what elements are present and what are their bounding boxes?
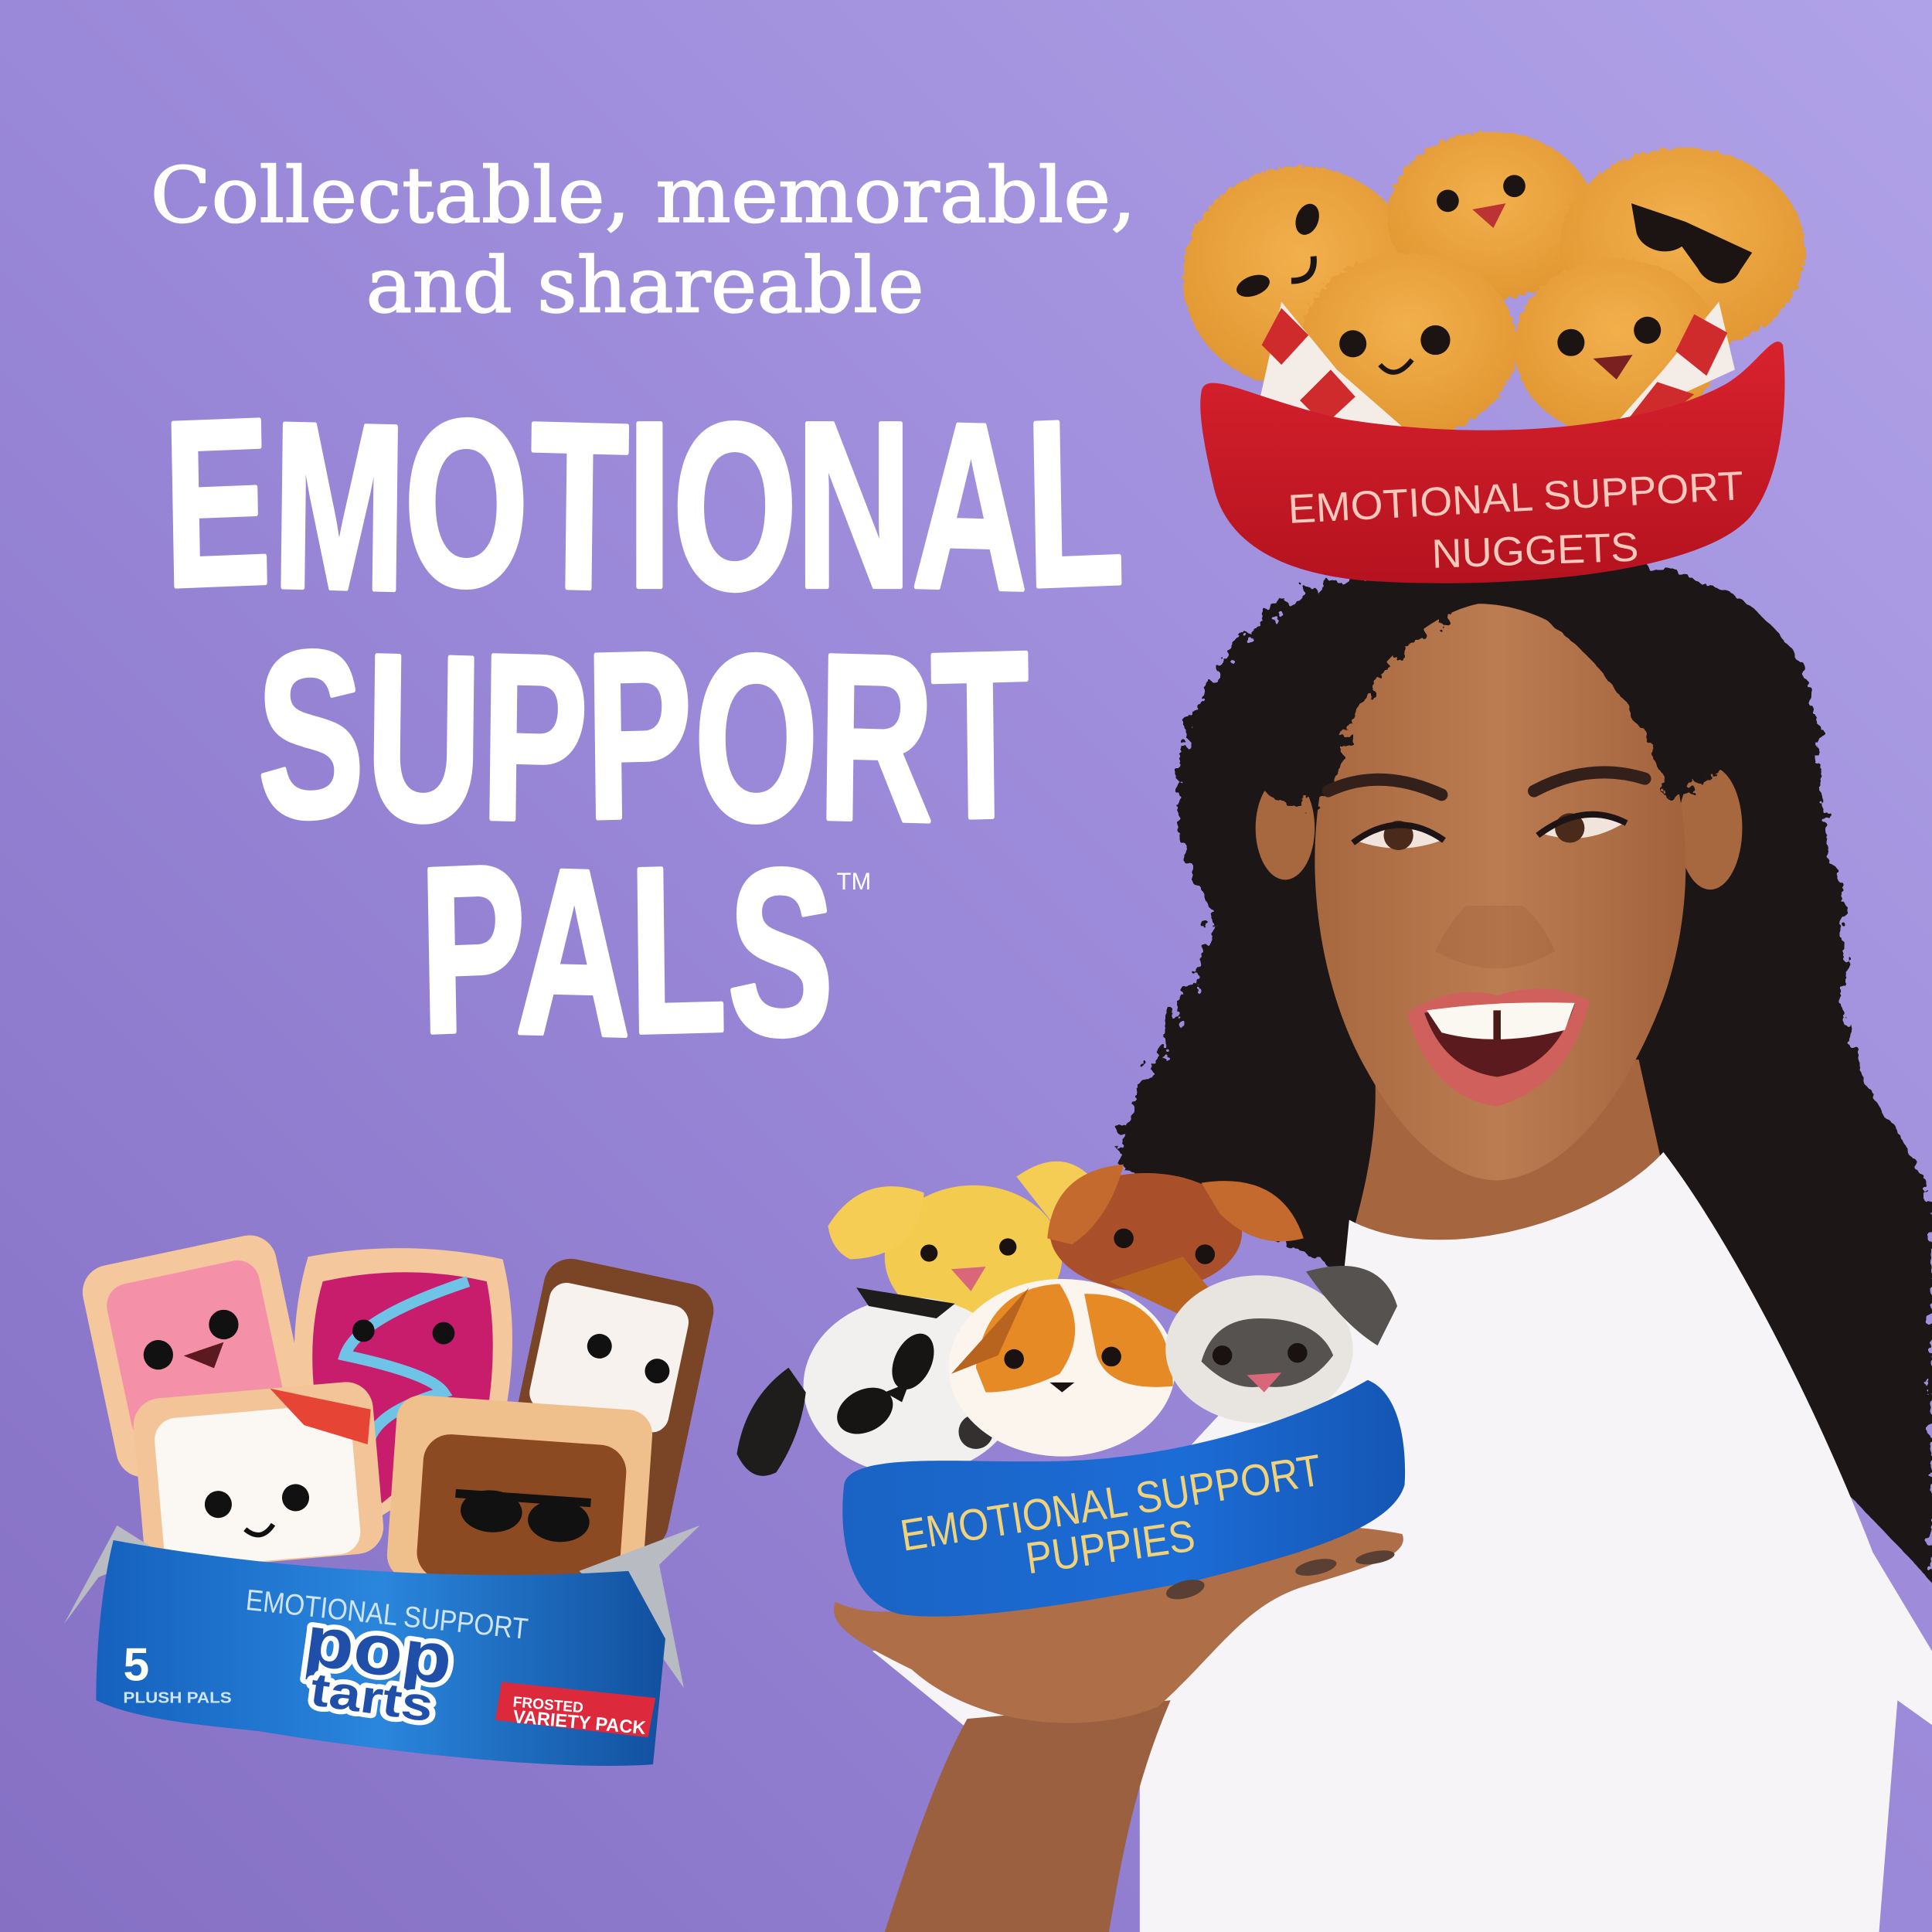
magenta tart: [294, 1248, 512, 1515]
foil flaps: [64, 1526, 700, 1688]
yellow puppy: [828, 1162, 1090, 1328]
pop-tarts box: [96, 1540, 665, 1766]
blue bowl: [842, 1380, 1405, 1617]
title: EMOTIONAL: [159, 369, 1126, 639]
product: emotional support nuggets: [1183, 132, 1805, 583]
box label: FROSTED: [512, 1694, 584, 1716]
ear right: [1679, 767, 1742, 889]
t-shirt: [872, 1152, 1932, 1932]
product: emotional support pop-tarts: [64, 1230, 719, 1766]
hair fringe left: [1243, 587, 1466, 804]
bowl label: NUGGETS: [1431, 525, 1639, 577]
neck: [1349, 1060, 1663, 1261]
white tart: [131, 1379, 386, 1573]
eyes: [1353, 813, 1627, 850]
brown puppy: [1047, 1165, 1304, 1291]
title: PALS: [416, 816, 837, 1085]
bowl label: EMOTIONAL SUPPORT: [897, 1446, 1325, 1561]
box label: [123, 1583, 655, 1739]
box label: PLUSH PALS: [123, 1689, 232, 1706]
title: [159, 369, 1126, 1085]
fingernails: [1164, 1548, 1396, 1603]
nose: [1435, 906, 1555, 968]
box label: tarts: [308, 1662, 437, 1732]
face: [1315, 604, 1685, 1180]
bowl label: PUPPIES: [1022, 1511, 1198, 1583]
bowl label: [1287, 463, 1745, 577]
subheading: and shareable: [366, 241, 924, 330]
ear left: [1256, 776, 1315, 879]
subheading: Collectable, memorable,: [151, 151, 1136, 240]
box label: pop: [300, 1600, 457, 1699]
hair back: [1119, 563, 1932, 1583]
woman: [834, 563, 1932, 1932]
pink tart: [77, 1230, 315, 1482]
nuggets: [1183, 132, 1805, 437]
hair fringe right: [1522, 585, 1750, 801]
checkered paper: [1257, 302, 1735, 429]
mouth: [1407, 988, 1590, 1107]
eyebrows: [1328, 772, 1645, 794]
arm: [885, 1700, 1171, 1932]
title: TM: [837, 867, 871, 895]
brown tart: [386, 1393, 654, 1596]
bowl label: [897, 1446, 1325, 1583]
chocolate tart: [494, 1253, 719, 1555]
nugget faces: [1233, 175, 1752, 379]
grey puppy: [1165, 1266, 1397, 1423]
title: SUPPORT: [253, 601, 1031, 870]
box label: VARIETY PACK: [512, 1706, 647, 1739]
red bowl: [1200, 342, 1784, 583]
box label: 5: [123, 1638, 149, 1691]
hand: [834, 1526, 1403, 1723]
bowl label: EMOTIONAL SUPPORT: [1287, 463, 1745, 532]
box label: EMOTIONAL SUPPORT: [244, 1583, 529, 1646]
panda puppy: [736, 1287, 1020, 1476]
orange puppy: [949, 1257, 1226, 1457]
product: emotional support puppies: [736, 1162, 1405, 1617]
subheading: [151, 151, 1136, 330]
